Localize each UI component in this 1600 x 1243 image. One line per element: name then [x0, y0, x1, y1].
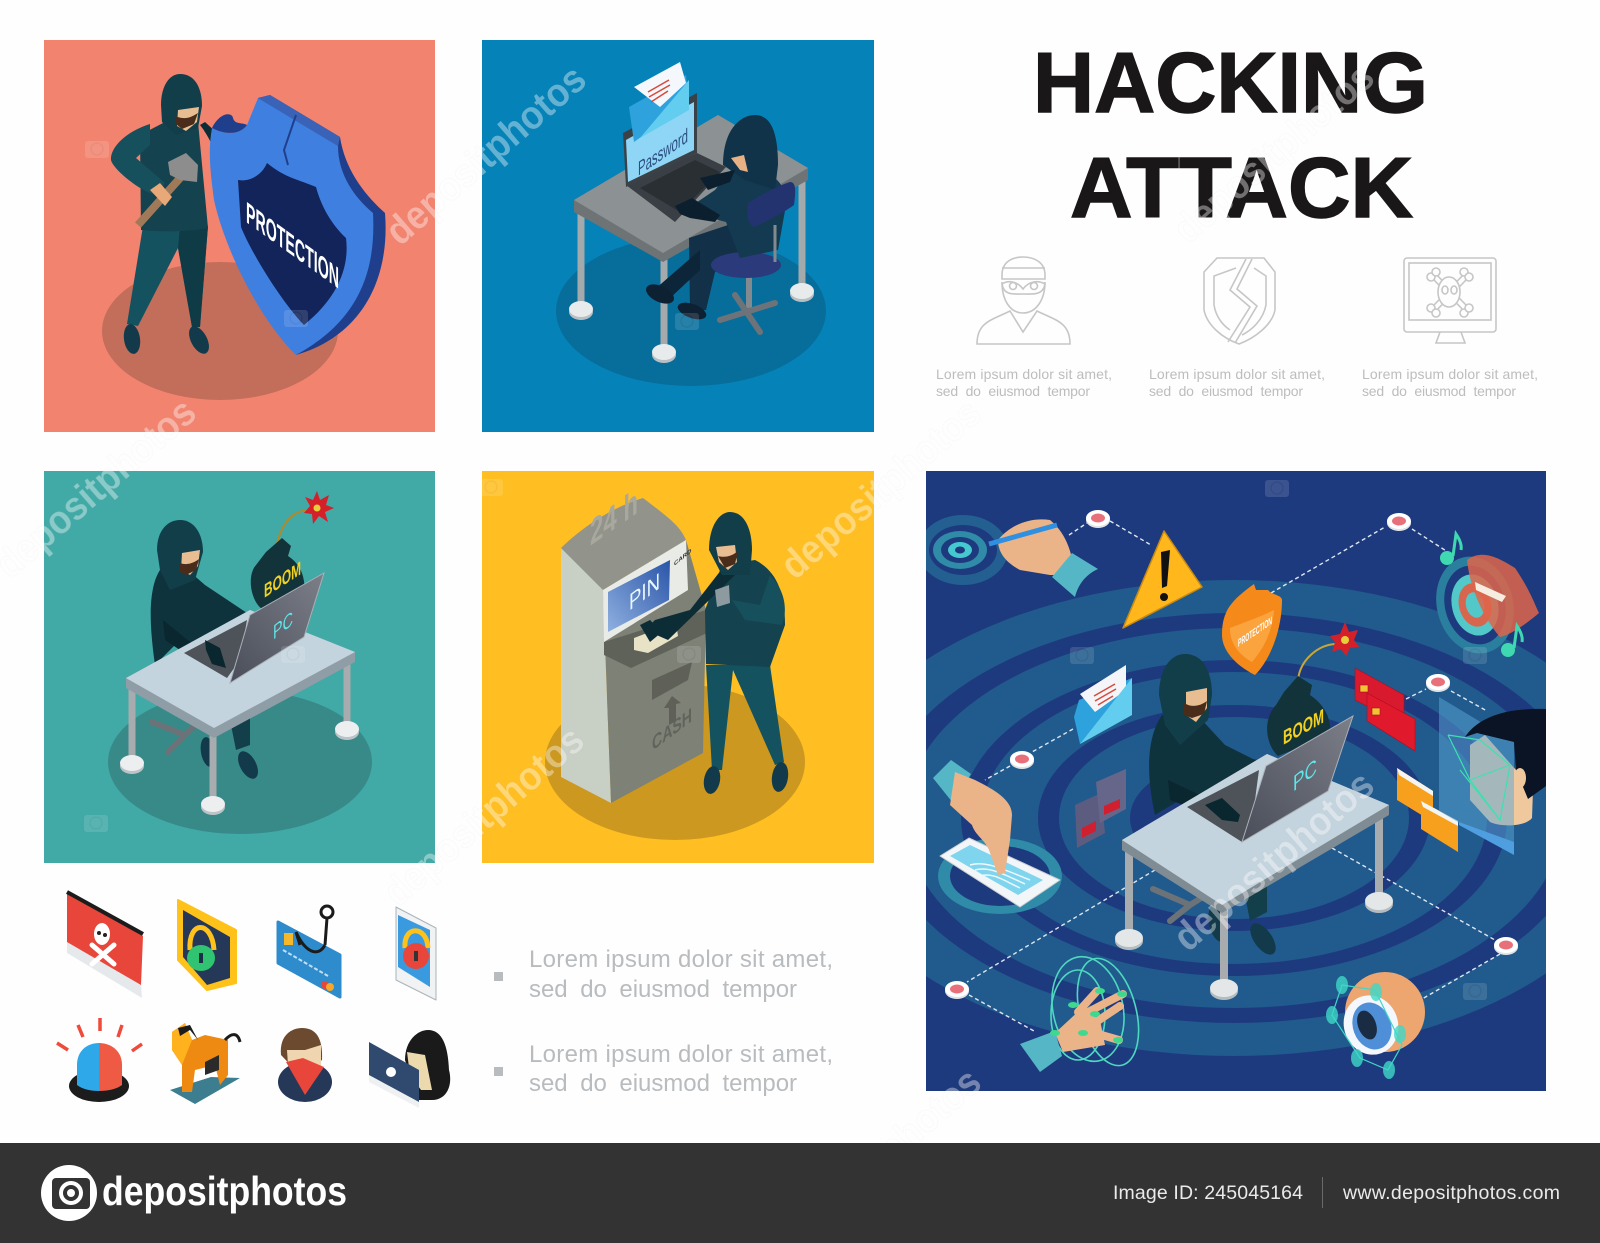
floor shadow	[108, 690, 372, 834]
icon: envelope	[1074, 665, 1132, 744]
hacker at keypad	[640, 512, 790, 795]
watermarks: depositphotos	[375, 718, 593, 915]
ATM machine: CASH	[652, 703, 692, 755]
desk with laptop	[120, 573, 359, 815]
footer bar	[0, 1143, 1600, 1243]
text block: monitor caption: sed do eiusmod tempor	[1362, 383, 1516, 399]
concentric floor rings	[926, 580, 1546, 1056]
icon: shield with green lock	[178, 900, 236, 990]
watermark camera marks	[84, 141, 1487, 1000]
watermarks: depositphotos	[772, 391, 990, 588]
panel: hacker at ATM	[482, 471, 874, 863]
text block: bulleted list item 2: Lorem ipsum dolor sit amet,	[529, 1041, 833, 1068]
icon: trojan horse	[170, 1023, 240, 1104]
icon: bomb: BOOM	[264, 558, 301, 603]
website: www.depositphotos.com	[1342, 1182, 1560, 1204]
icon: warning triangle	[1123, 531, 1202, 628]
hacker at laptop	[1149, 654, 1281, 959]
text block: shield caption: sed do eiusmod tempor	[1149, 383, 1303, 399]
icon: locked smartphone	[396, 907, 436, 1000]
title: HACKING	[1033, 36, 1428, 131]
icon: outlined broken shield	[1204, 258, 1275, 344]
text block: robber caption	[936, 366, 1112, 399]
panel: hacker surrounded by biometric systems	[926, 471, 1546, 1091]
icon: alarm siren	[57, 1018, 142, 1102]
icon: masked bandit	[278, 1028, 332, 1102]
watermarks: depositphotos	[1165, 763, 1383, 960]
icon: folders	[1397, 768, 1458, 852]
connector nodes	[945, 510, 1518, 999]
desk with laptop: PC	[273, 606, 293, 644]
desk with laptop	[1115, 716, 1393, 1000]
icon: fingerprint tablet with pen hand	[918, 515, 1098, 597]
icon: bomb	[251, 491, 334, 609]
logo: wordmark: depositphotos	[102, 1168, 347, 1214]
text block: shield caption: Lorem ipsum dolor sit amet,	[1149, 366, 1325, 382]
icon: eye scan	[1326, 972, 1425, 1079]
text block: bulleted list item 1: Lorem ipsum dolor sit amet,	[529, 946, 833, 973]
ATM machine: CARD	[674, 548, 691, 568]
ATM machine: PIN	[629, 567, 660, 616]
desk	[569, 115, 814, 363]
shield: protection	[210, 95, 386, 355]
icon: phishing credit card	[278, 906, 340, 997]
text block: robber caption: Lorem ipsum dolor sit amet,	[936, 366, 1112, 382]
icon: credit cards	[1355, 668, 1415, 751]
icon: outlined robber	[977, 257, 1070, 344]
laptop with password screen	[623, 93, 726, 222]
title: ATTACK	[1070, 141, 1413, 236]
floor shadow	[556, 236, 826, 386]
laptop with password screen: Password	[638, 124, 688, 180]
icon: face recognition	[1439, 697, 1546, 855]
text block: bulleted list item 2: sed do eiusmod tempor	[529, 1070, 797, 1097]
ATM machine: 24 h	[590, 480, 638, 554]
shield: protection: PROTECTION	[246, 196, 339, 296]
text block: bulleted list item 1: sed do eiusmod tempor	[529, 976, 797, 1003]
icon: memory cards	[1075, 769, 1126, 848]
text block: bulleted list item 1	[494, 946, 833, 1003]
text block: bulleted list item 2	[494, 1041, 833, 1097]
icon: monitor with skull	[67, 892, 143, 998]
text block: robber caption: sed do eiusmod tempor	[936, 383, 1090, 399]
icon: orange shield: PROTECTION	[1238, 614, 1272, 650]
logo: camera mark	[41, 1165, 97, 1221]
ATM machine	[561, 480, 707, 803]
image id: Image ID: 245045164	[1113, 1182, 1303, 1204]
icon: orange shield	[1222, 584, 1282, 675]
icon: hand scan	[1020, 956, 1140, 1072]
panel: hacker stealing password	[482, 40, 874, 432]
floor shadow	[102, 262, 338, 400]
hacker with hammer	[111, 74, 277, 357]
hacker on chair	[643, 115, 795, 332]
dashed connectors	[967, 521, 1500, 1031]
title	[1033, 36, 1428, 236]
icon: smartphone fingerprint with hand	[933, 760, 1062, 914]
desk with laptop: PC	[1293, 754, 1317, 797]
icon: outlined monitor with skull	[1404, 258, 1496, 343]
hacker seated	[151, 520, 262, 782]
text block: monitor caption	[1362, 366, 1538, 399]
icon: bomb: BOOM	[1283, 704, 1324, 750]
icon: email envelope	[629, 62, 689, 142]
icon: bomb	[1267, 622, 1359, 756]
text block: shield caption	[1149, 366, 1325, 399]
text block: monitor caption: Lorem ipsum dolor sit amet,	[1362, 366, 1538, 382]
divider	[1322, 1177, 1323, 1208]
floor shadow	[545, 684, 805, 840]
panel: hacker with bomb and laptop	[44, 471, 435, 863]
watermarks: depositphotos	[1165, 55, 1383, 252]
icon: hacker with laptop	[369, 1030, 450, 1108]
watermarks: depositphotos	[377, 57, 595, 254]
panel: hacker breaking shield	[44, 40, 435, 432]
icon: voice recognition lips	[1426, 534, 1539, 662]
